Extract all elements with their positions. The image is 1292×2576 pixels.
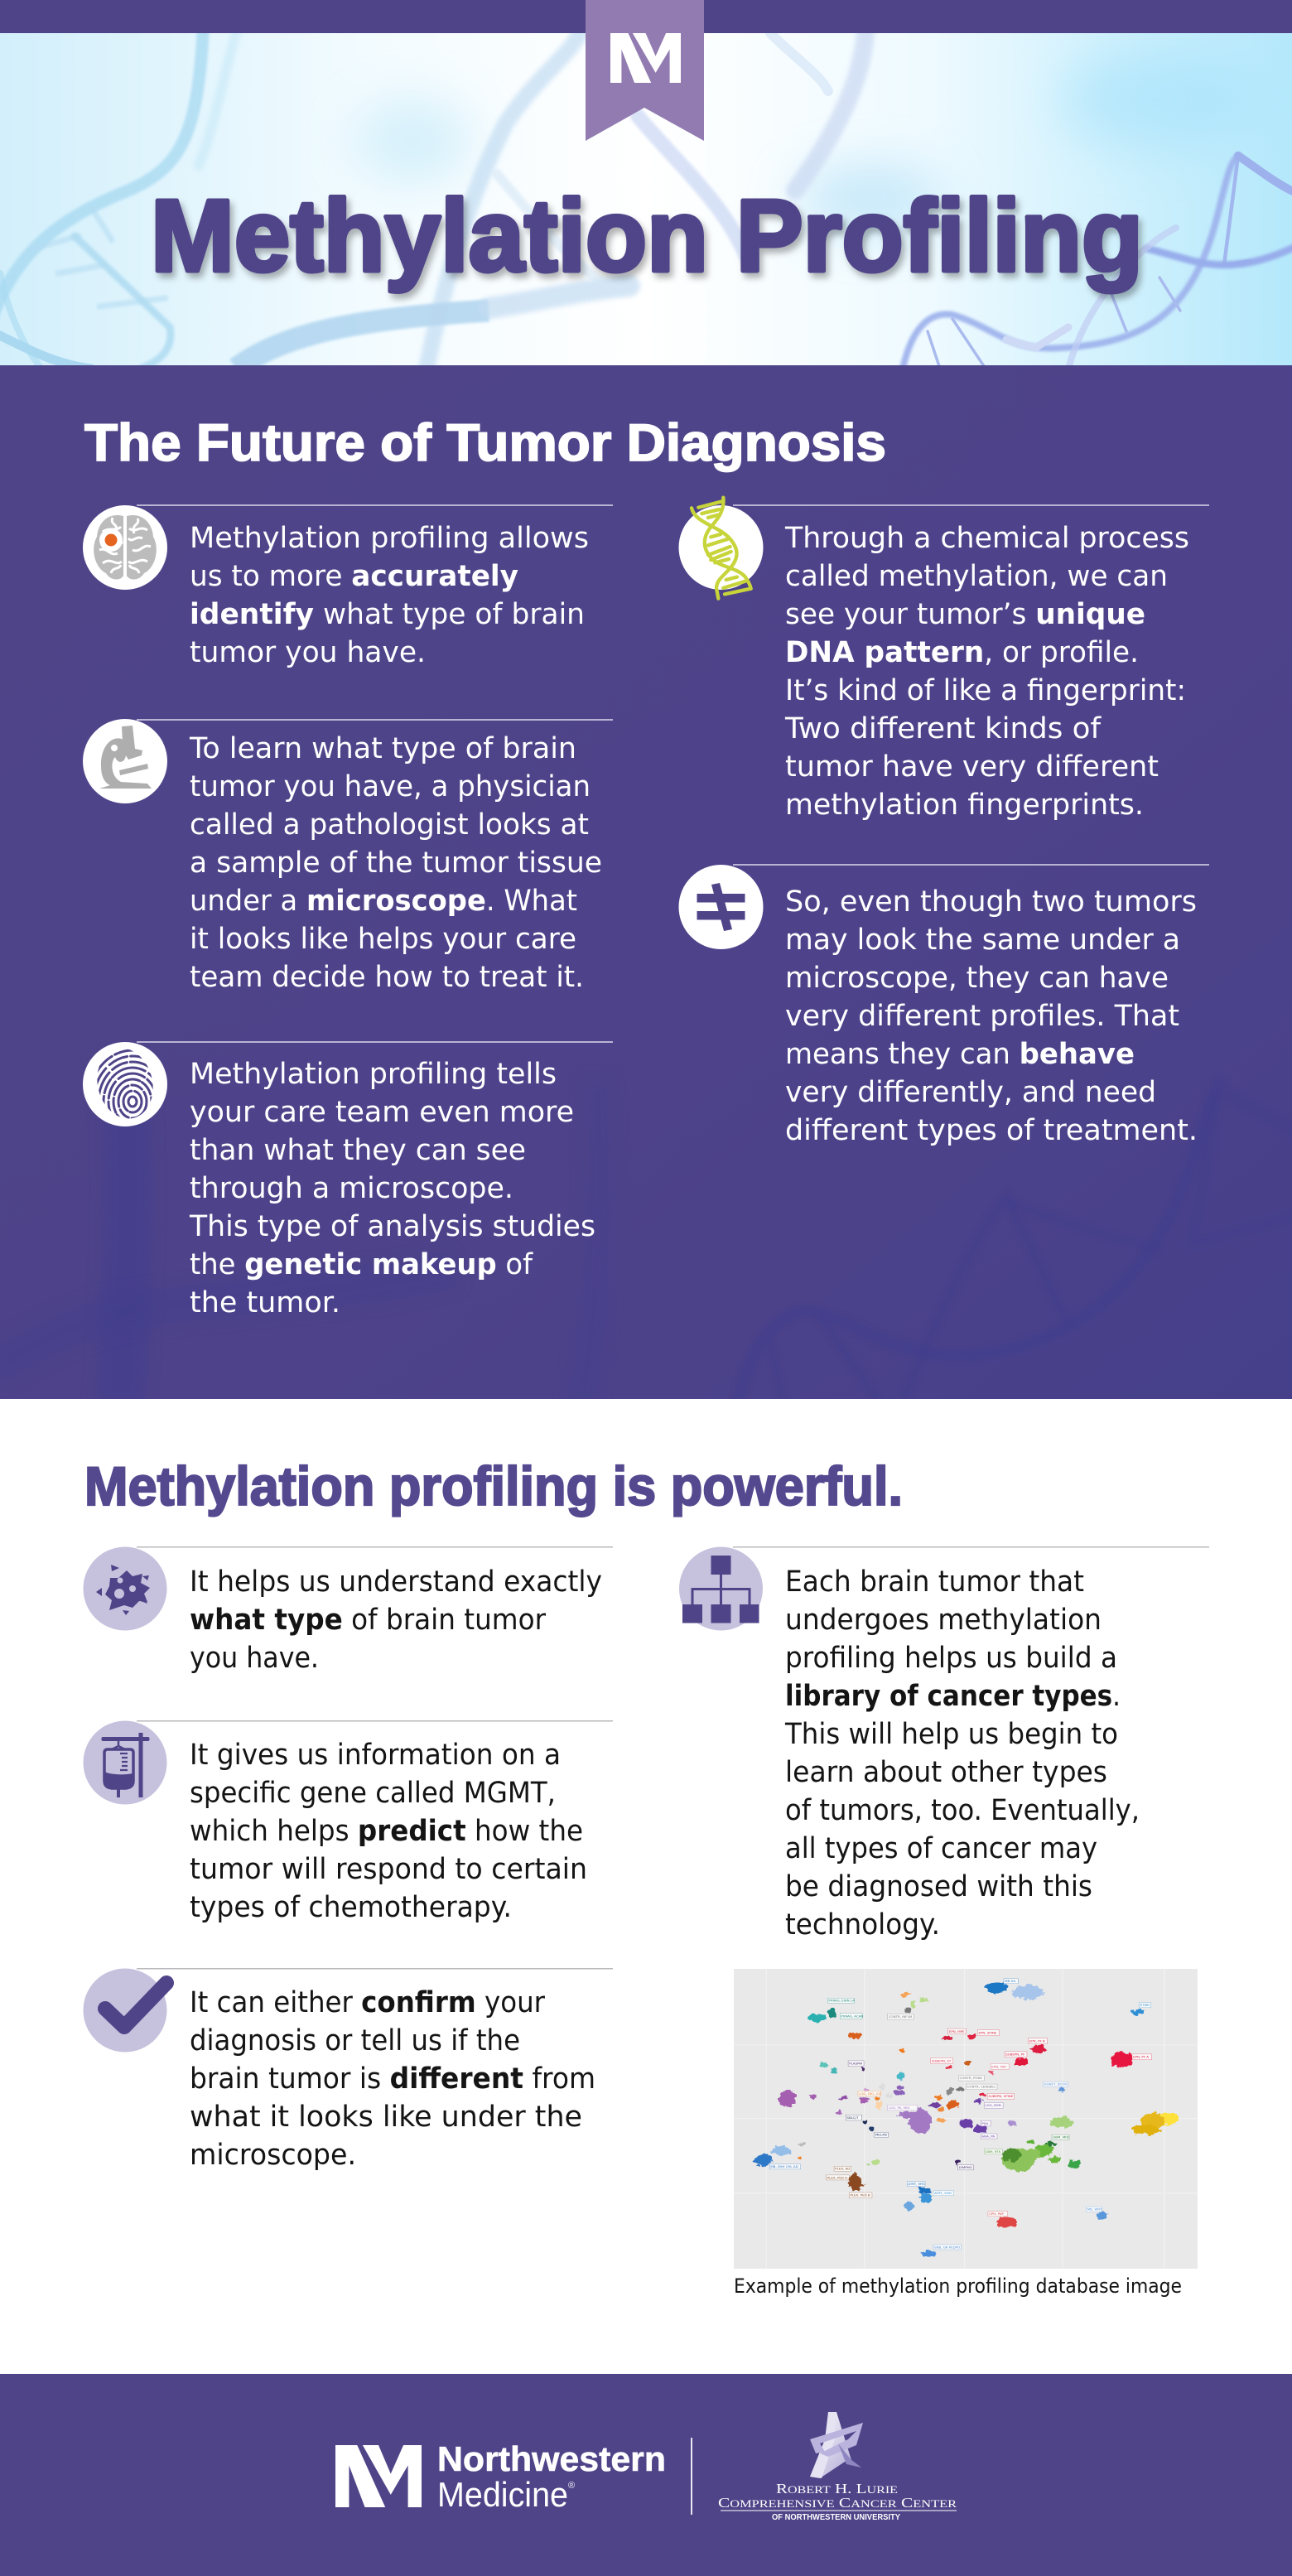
chart: methylation profiling database scatter map: HGNET, BCOR — [1044, 2083, 1068, 2086]
chart: methylation profiling database scatter map: CPH, PAP — [989, 2212, 1005, 2216]
chart: methylation profiling database scatter map: PLEX, PED A — [827, 2177, 847, 2179]
chart: methylation profiling database scatter map: EPN, PF B — [1029, 2040, 1045, 2043]
icon: hierarchy — [679, 1547, 763, 1630]
item: library of cancer types: profiling helps us build a — [785, 1642, 1117, 1675]
item: not equal — [679, 864, 1209, 1147]
item: confirm — [83, 1968, 613, 2172]
icon: fingerprint — [83, 1042, 167, 1126]
logo: Robert H. Lurie Comprehensive Cancer Center — [718, 2412, 957, 2522]
icon: check mark — [83, 1968, 167, 2053]
chart: methylation profiling database scatter map: SUBEPN, PF — [1005, 2053, 1024, 2056]
logo: Robert H. Lurie Comprehensive Cancer Center: OF NORTHWESTERN UNIVERSITY — [772, 2513, 900, 2522]
item: MGMT — [83, 1720, 613, 1924]
item: library of cancer types: of tumors, too. Eventually, — [785, 1794, 1140, 1827]
text: Methylation profiling tells — [190, 1058, 557, 1091]
chart: methylation profiling database scatter map: MB, WNT — [1087, 2208, 1102, 2211]
item: microscope: under a microscope. What — [190, 885, 577, 918]
chart: methylation profiling database scatter map: SUBEPN, ST — [932, 2060, 952, 2062]
chart: methylation profiling database scatter map: PLASMA — [849, 2062, 863, 2066]
item: microscope — [83, 719, 613, 994]
item: what type: you have. — [190, 1642, 319, 1675]
item: fingerprint — [83, 1041, 613, 1319]
item: confirm: diagnosis or tell us if the — [190, 2024, 520, 2057]
item: library of cancer types: This will help us begin to — [784, 1718, 1118, 1751]
logo: Robert H. Lurie Comprehensive Cancer Center: COMPREHENSIVE C ANCER C ENTER — [718, 2495, 957, 2511]
item: library of cancer types: learn about other types — [785, 1756, 1107, 1789]
chart: methylation profiling database scatter map: GBM, MID — [1053, 2136, 1069, 2139]
icon: brain with tumor — [83, 505, 167, 590]
chart: methylation profiling database scatter map: CONTR, INFLM — [889, 2015, 912, 2019]
item: DNA pattern: methylation fingerprints. — [785, 789, 1144, 822]
item: confirm: brain tumor is different from — [190, 2062, 595, 2096]
chart: methylation profiling database scatter map: SUBEPN, SPINE — [988, 2095, 1014, 2098]
chart: methylation profiling database scatter map: PLEX, PED B — [850, 2194, 870, 2197]
caption: Example of methylation profiling database image — [734, 2275, 1182, 2298]
chart: methylation profiling database scatter map: ATRT, MYC — [908, 2183, 925, 2186]
divider — [691, 2438, 692, 2515]
text: To learn what type of brain — [189, 732, 576, 765]
item: accurately identify: us to more accurately — [190, 560, 518, 593]
chart: methylation profiling database scatter map: MELAN — [875, 2134, 887, 2137]
logo: Northwestern Medicine — [335, 2439, 666, 2514]
item: microscope: it looks like helps your care — [190, 923, 576, 956]
item: microscope: called a pathologist looks at — [190, 808, 589, 842]
chart: methylation profiling database scatter map: LYMPHO — [959, 2166, 972, 2169]
item: DNA pattern: It’s kind of like a fingerprint: — [785, 674, 1186, 707]
text: Each brain tumor that — [785, 1565, 1084, 1599]
item: MGMT: tumor will respond to certain — [190, 1853, 587, 1886]
text: It helps us understand exactly — [190, 1565, 602, 1599]
text: It gives us information on a — [190, 1739, 561, 1772]
title: Methylation Profiling — [151, 180, 1143, 293]
top band — [0, 0, 1292, 33]
item: microscope: team decide how to treat it. — [190, 961, 584, 994]
icon: not-equal sign — [679, 865, 764, 949]
item: fingerprint: through a microscope. — [190, 1172, 513, 1205]
item: accurately identify: tumor you have. — [190, 636, 426, 669]
item: MGMT: which helps predict how the — [190, 1815, 583, 1848]
section heading: Methylation profiling is powerful. — [84, 1455, 903, 1517]
logo: Robert H. Lurie Comprehensive Cancer Center: ROBERT H. L URIE — [776, 2481, 898, 2496]
footer — [0, 2374, 1292, 2576]
ribbon with NM logo — [586, 0, 704, 141]
logo: Northwestern Medicine: Northwestern — [437, 2439, 666, 2478]
item: not equal: may look the same under a — [785, 924, 1180, 957]
chart: methylation profiling database scatter map: LGG, MYB — [985, 2104, 1001, 2107]
item: accurately identify: identify what type of brain — [190, 598, 585, 631]
item: fingerprint: This type of analysis studies — [189, 1210, 595, 1243]
item: confirm: microscope. — [190, 2139, 356, 2172]
item: fingerprint: your care team even more — [190, 1096, 574, 1129]
item: not equal: means they can behave — [785, 1038, 1135, 1071]
item: library of cancer types: technology. — [785, 1908, 940, 1942]
icon: tumor cell — [83, 1547, 167, 1630]
item: not equal: microscope, they can have — [785, 962, 1169, 995]
chart: methylation profiling database scatter map: GBM, RTK — [985, 2150, 1001, 2154]
item: not equal: different types of treatment. — [785, 1114, 1198, 1147]
item: microscope: a sample of the tumor tissue — [190, 847, 602, 880]
icon: DNA helix — [679, 498, 764, 599]
logo: Northwestern Medicine: Medicine — [437, 2475, 568, 2514]
item: fingerprint: the tumor. — [190, 1286, 340, 1319]
chart: methylation profiling database scatter map: LGG, PA, MID — [889, 2106, 910, 2110]
section heading: The Future of Tumor Diagnosis — [84, 414, 886, 472]
chart: methylation profiling database scatter map: CONTR, CEREBEL — [967, 2086, 996, 2089]
item: DNA pattern: tumor have very different — [785, 750, 1159, 784]
item: library of cancer types: be diagnosed with this — [785, 1870, 1092, 1903]
purple background DNA — [0, 1077, 1292, 1408]
item: library of cancer types: undergoes methylation — [785, 1604, 1102, 1637]
chart: methylation profiling database scatter map — [734, 1969, 1198, 2269]
item: accurately identify — [83, 504, 613, 669]
panel: methylation profiling is powerful — [0, 1399, 1292, 2374]
icon: star — [810, 2412, 863, 2478]
chart: methylation profiling database scatter map: PXA — [981, 2122, 989, 2125]
item: what type: what type of brain tumor — [190, 1604, 547, 1637]
item: confirm: what it looks like under the — [190, 2101, 582, 2134]
item: fingerprint: the genetic makeup of — [190, 1248, 533, 1281]
chart: methylation profiling database scatter map: CONTR, PONS — [960, 2077, 983, 2080]
logo: NM mark — [610, 33, 681, 83]
chart: methylation profiling database scatter map: LGG, DIG, GG — [859, 2092, 881, 2096]
item: library of cancer types: all types of cancer may — [785, 1832, 1097, 1865]
text: Through a chemical process — [784, 522, 1189, 555]
chart: methylation profiling database scatter map: EPN, PF A — [1133, 2056, 1150, 2058]
icon: IV bag — [83, 1721, 167, 1804]
item: not equal: very differently, and need — [785, 1076, 1156, 1109]
chart: methylation profiling database scatter map: ETMR — [1140, 2004, 1150, 2007]
header banner with DNA background — [0, 33, 1292, 369]
item: DNA pattern: Two different kinds of — [784, 712, 1102, 745]
item: library of cancer types: library of cancer types. — [785, 1680, 1121, 1713]
chart: methylation profiling database scatter map: PLEX, AD — [835, 2168, 850, 2170]
text: It can either confirm your — [190, 1986, 546, 2019]
icon: microscope — [83, 719, 167, 803]
item: library of cancer types — [679, 1546, 1209, 1942]
text: So, even though two tumors — [785, 885, 1197, 919]
logo: Northwestern Medicine: ® — [568, 2481, 575, 2491]
item: DNA pattern — [679, 498, 1209, 822]
chart: methylation profiling database scatter map: MB G4 — [1005, 1980, 1016, 1983]
item: fingerprint: than what they can see — [190, 1134, 526, 1167]
chart: methylation profiling database scatter map: ENB, GR PEDPO — [934, 2246, 960, 2249]
chart: methylation profiling database scatter map: EPN, MPE — [949, 2030, 965, 2033]
item: DNA pattern: see your tumor’s unique — [785, 598, 1145, 631]
item: microscope: tumor you have, a physician — [190, 770, 591, 803]
item: DNA pattern: called methylation, we can — [785, 560, 1168, 593]
chart: methylation profiling database scatter map: SBLC/T — [847, 2116, 859, 2120]
chart: methylation profiling database scatter map: PXRAG, EWN LA — [828, 2000, 855, 2003]
chart: methylation profiling database scatter map: MB, SHH CHL AD — [770, 2165, 798, 2168]
text: Methylation profiling allows — [190, 522, 589, 555]
chart: methylation profiling database scatter map: PXRAG, ACAN — [841, 2015, 864, 2018]
panel: the future of tumor diagnosis — [0, 365, 1292, 1408]
item: MGMT: types of chemotherapy. — [190, 1891, 512, 1924]
item: what type — [83, 1546, 613, 1675]
item: DNA pattern: DNA pattern, or profile. — [785, 636, 1139, 669]
item: MGMT: specific gene called MGMT, — [190, 1777, 556, 1810]
item: not equal: very different profiles. That — [785, 1000, 1179, 1033]
chart: methylation profiling database scatter map: EPN, YAP — [991, 2066, 1007, 2068]
chart: methylation profiling database scatter map: EPN, SPINE — [978, 2032, 997, 2034]
chart: methylation profiling database scatter map: ATRT, SHH — [934, 2192, 952, 2195]
chart: methylation profiling database scatter map: ANA, PA — [981, 2135, 996, 2138]
